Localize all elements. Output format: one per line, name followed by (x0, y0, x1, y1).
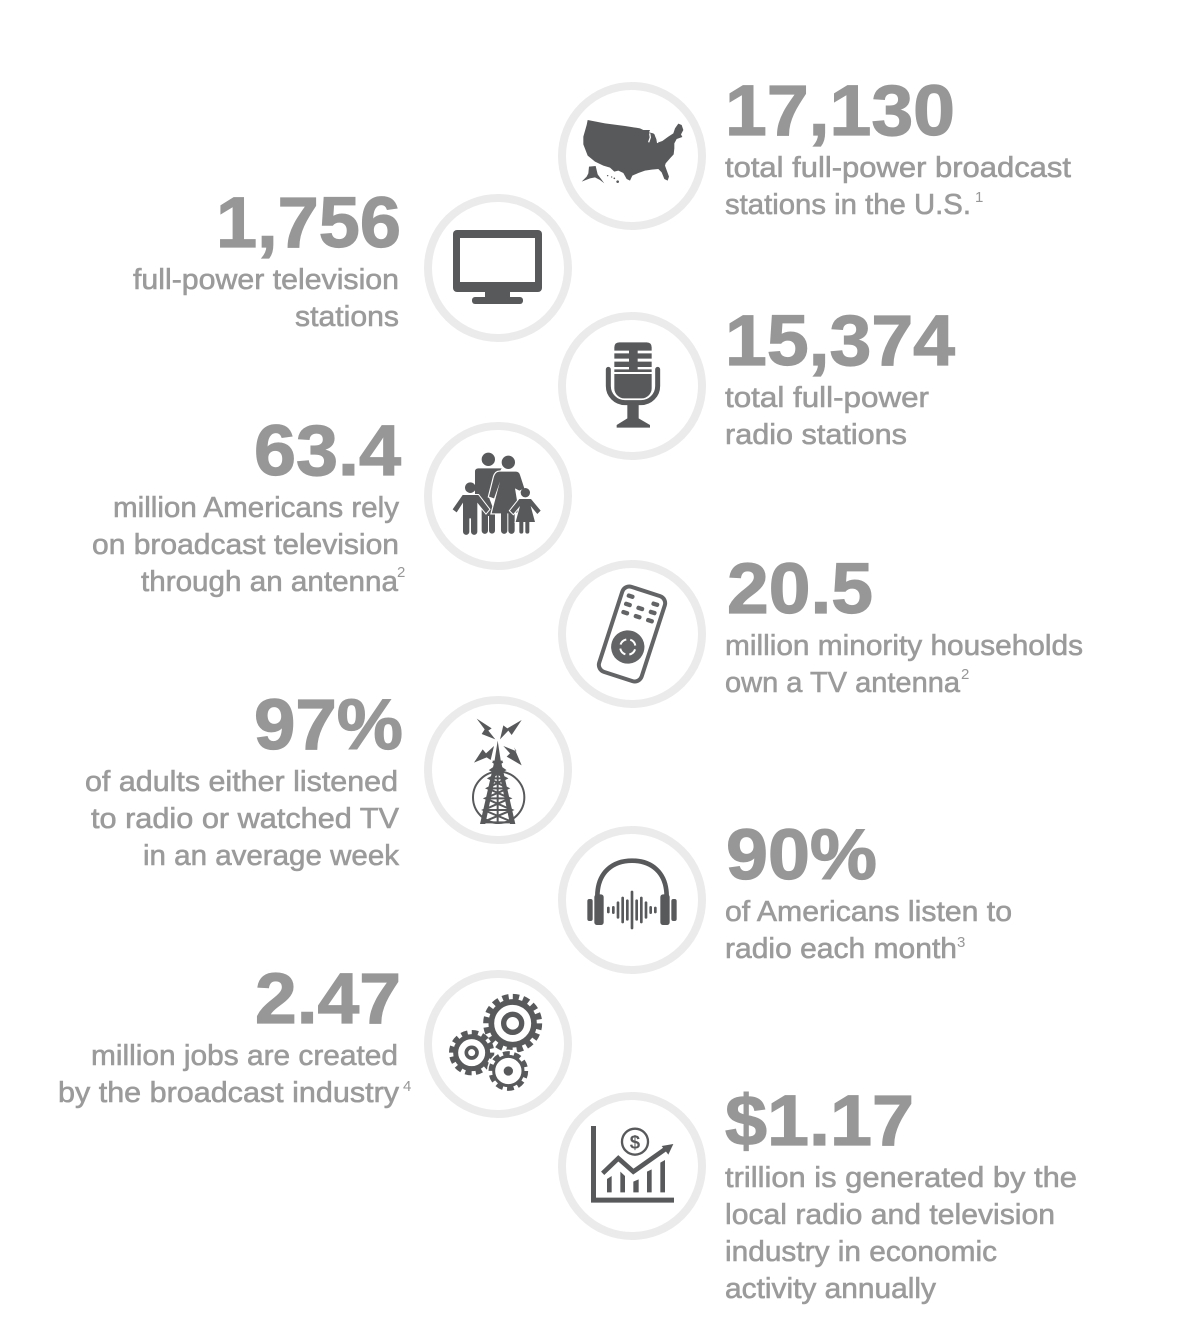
small gear (487, 1050, 530, 1092)
icon: family (453, 453, 541, 535)
stat: 1,756 television: stations (295, 301, 399, 333)
stat: 97%: 97% (254, 686, 403, 765)
ring: remote (562, 564, 702, 704)
stat: 2.47 million: million jobs are created (91, 1040, 398, 1072)
icon: growth chart (591, 1126, 674, 1203)
stat: 63.4 million: through an antenna (141, 566, 399, 598)
stat: 1,756 television (133, 184, 401, 333)
stat: 17,130 stations: total full-power broadcast (725, 152, 1071, 184)
ring: chart (562, 1096, 702, 1236)
stat: 1,756 television: full-power television (133, 264, 399, 296)
stat: 15,374 radio (725, 302, 956, 451)
stat: 97%: in an average week (143, 840, 400, 872)
stat: 17,130 stations (725, 72, 1071, 221)
ring: headphones (562, 830, 702, 970)
ring: family (428, 426, 568, 566)
ring: tower (428, 700, 568, 840)
stat: 20.5 million: 20.5 (727, 550, 873, 629)
stat: 20.5 million: own a TV antenna (725, 667, 961, 699)
stat: 17,130 stations: 17,130 (725, 72, 955, 151)
stat: 63.4 million: on broadcast television (92, 529, 399, 561)
stat: $1.17 trillion: local radio and television (725, 1199, 1055, 1231)
stat: 2.47 million: by the broadcast industry (58, 1077, 400, 1109)
stat: 20.5 million (725, 550, 1083, 699)
stat: $1.17 trillion: activity annually (725, 1273, 937, 1305)
stat: $1.17 trillion: $1.17 (725, 1082, 914, 1161)
ring: gears (428, 974, 568, 1114)
icon: gears (450, 997, 539, 1092)
stat: 17,130 stations: stations in the U.S. (725, 189, 971, 221)
icon: growth chart: $ (630, 1131, 641, 1152)
icon: headphones (587, 861, 677, 928)
stat: 90%: 3 (957, 934, 965, 951)
stat: 63.4 million: 63.4 (254, 412, 402, 491)
stat: $1.17 trillion: industry in economic (725, 1236, 997, 1268)
stat: 90%: radio each month (725, 933, 957, 965)
stat: 2.47 million (58, 960, 411, 1109)
stat: 90%: of Americans listen to (725, 896, 1012, 928)
stat: 2.47 million: 2.47 (255, 960, 401, 1039)
stat: $1.17 trillion (725, 1082, 1077, 1305)
ring: stations total (562, 86, 702, 226)
stat: 20.5 million: million minority households (725, 630, 1083, 662)
stat: 90%: 90% (726, 816, 877, 895)
large gear (486, 997, 539, 1050)
medium gear (450, 1031, 494, 1075)
ring: television (428, 198, 568, 338)
icon: television (453, 230, 542, 304)
ring: radio (562, 316, 702, 456)
icon: US map (582, 120, 683, 183)
stat: 20.5 million: 2 (961, 666, 969, 683)
icon: remote control (597, 585, 667, 683)
stat: 90% (725, 816, 1012, 965)
stat: 63.4 million (92, 412, 405, 598)
stat: 97%: to radio or watched TV (91, 803, 400, 835)
stat: $1.17 trillion: trillion is generated by the (725, 1162, 1077, 1194)
stat: 15,374 radio: radio stations (725, 419, 907, 451)
icon: microphone (608, 342, 658, 428)
stat: 15,374 radio: 15,374 (725, 302, 956, 381)
stat: 97%: of adults either listened (85, 766, 398, 798)
stat: 2.47 million: 4 (403, 1078, 411, 1095)
stat: 1,756 television: 1,756 (216, 184, 401, 263)
icon: broadcast tower (473, 719, 524, 824)
stat: 97% (85, 686, 403, 872)
stat: 15,374 radio: total full-power (725, 382, 929, 414)
stat: 63.4 million: 2 (397, 564, 405, 581)
stat: 17,130 stations: 1 (975, 189, 983, 206)
stat: 63.4 million: million Americans rely (113, 492, 400, 524)
